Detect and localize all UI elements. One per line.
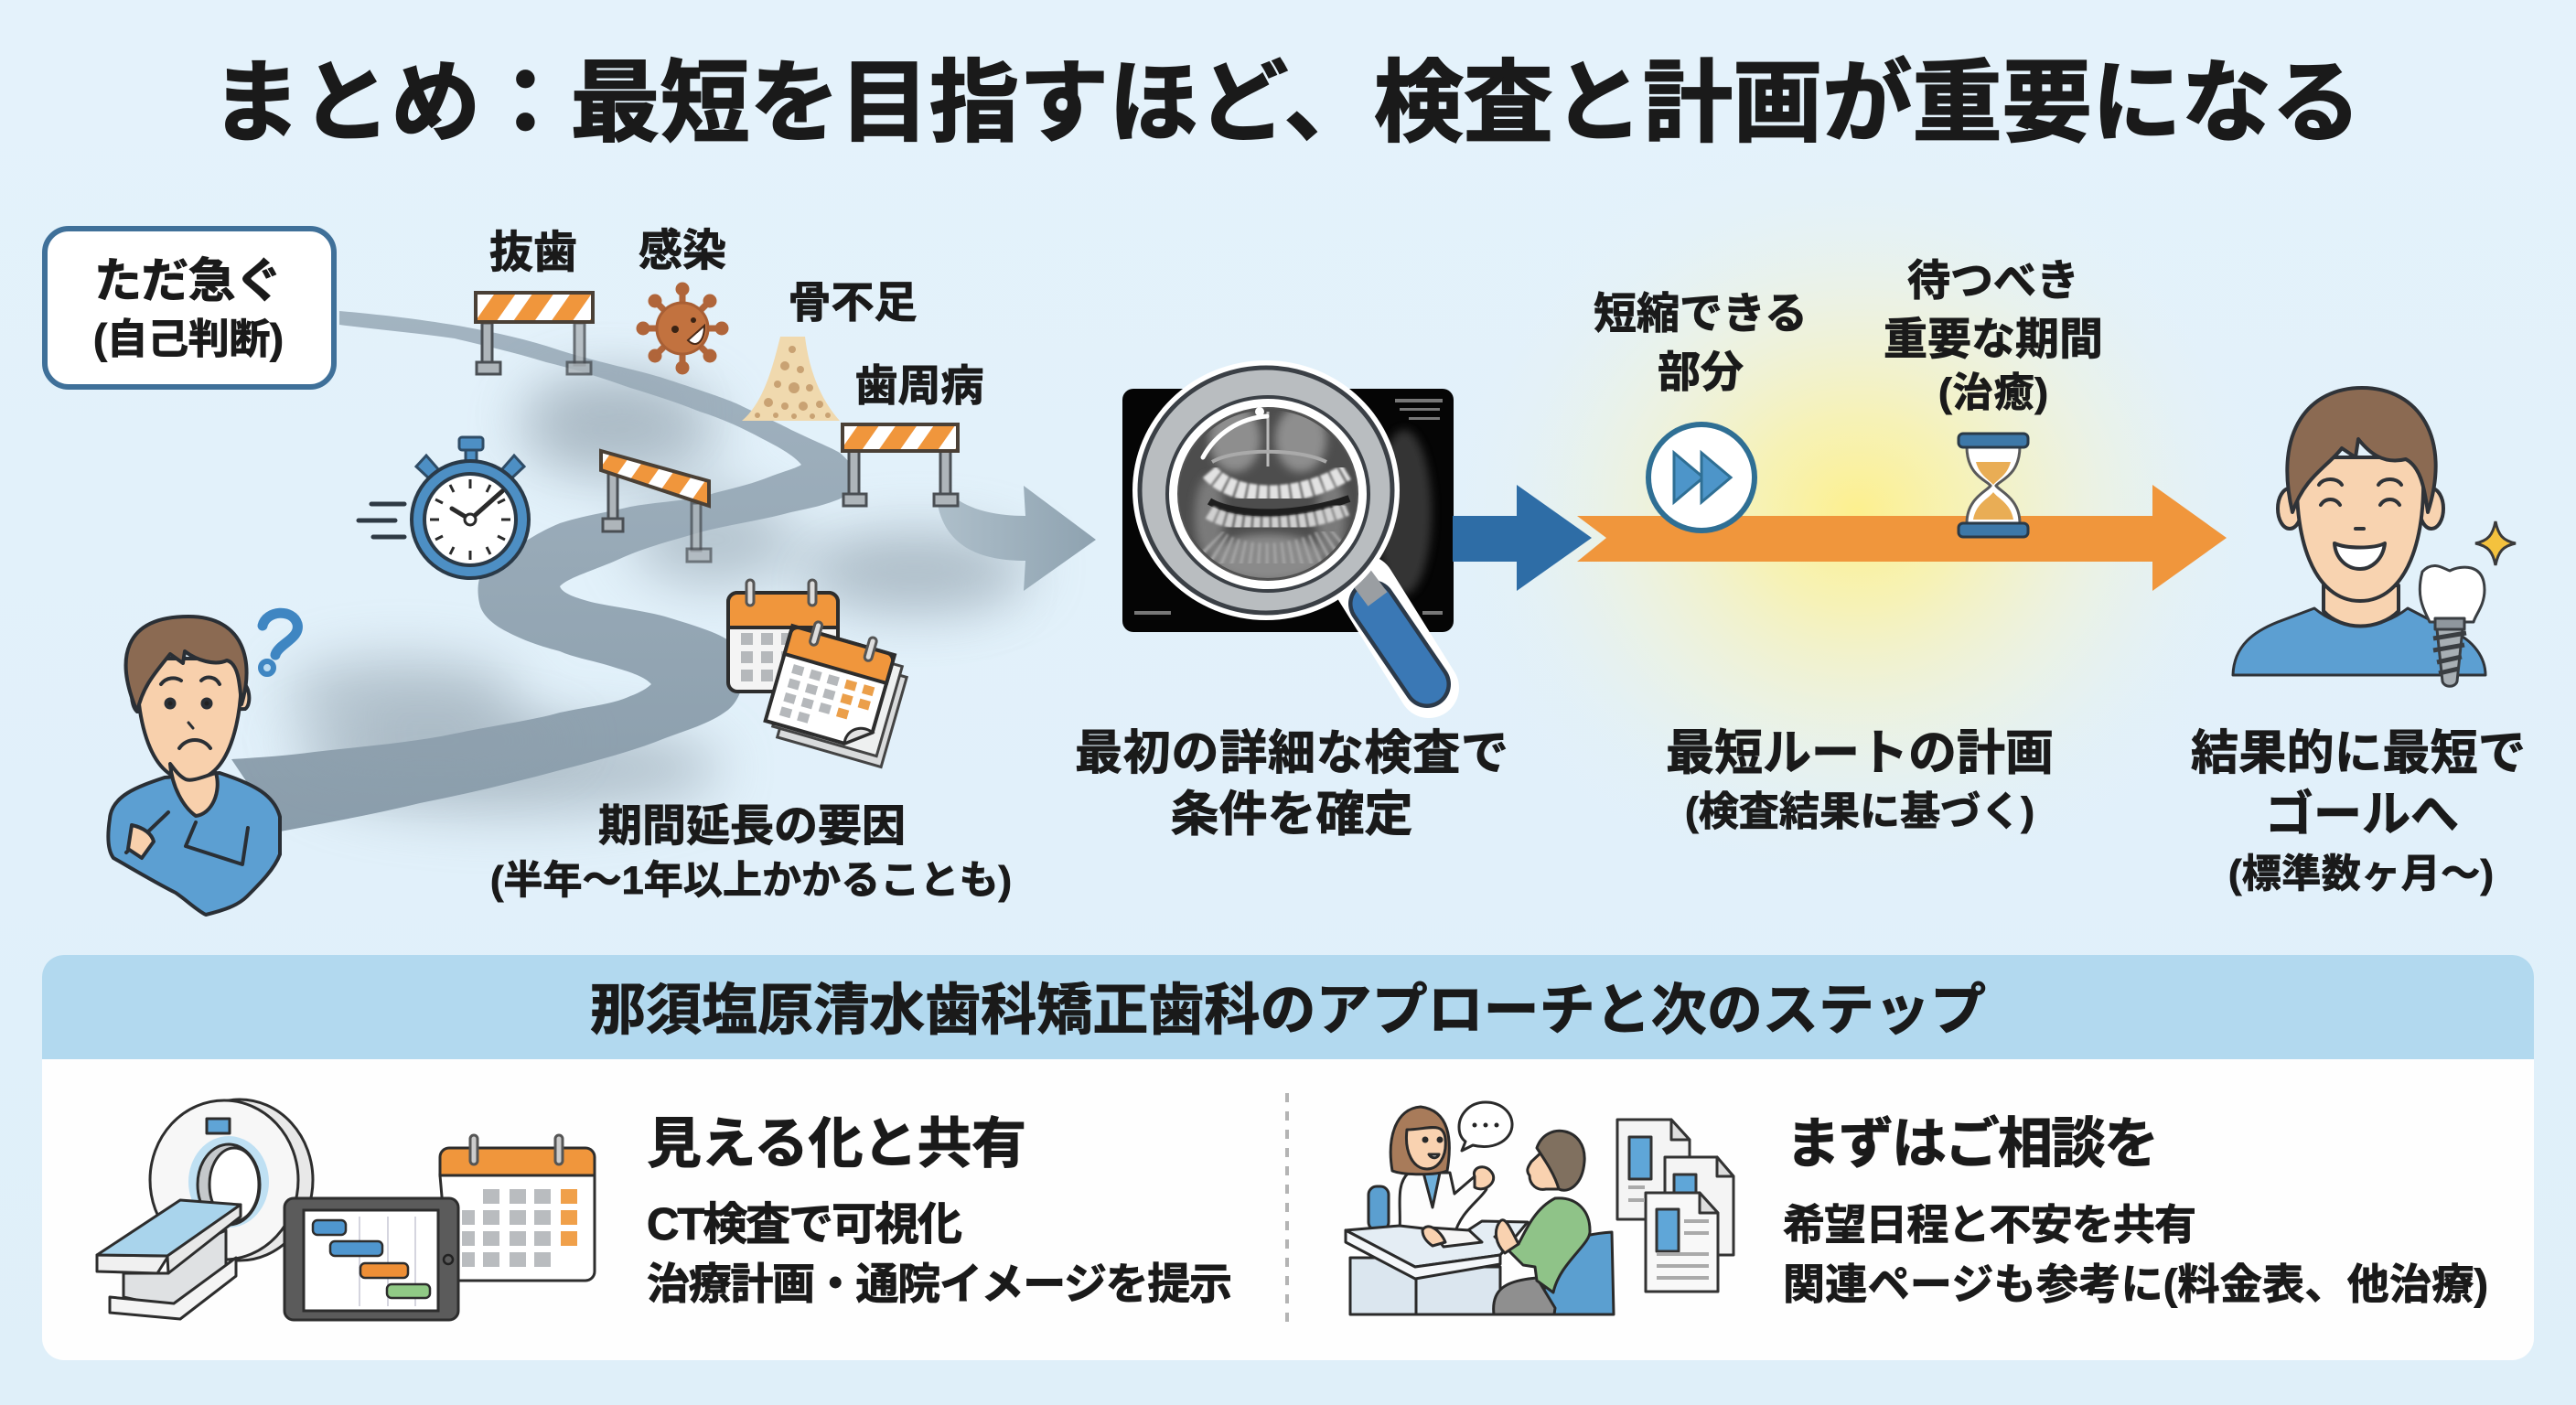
callout: rushing: (自己判断) [93,316,284,362]
label: important waiting period: 重要な期間 [1884,316,2103,364]
text: consult first: 関連ページも参考に(料金表、他治療) [1783,1260,2488,1308]
icon: hourglass [1959,434,2028,537]
icon: calendars [728,580,909,767]
panel: approach and next steps [42,955,2534,1360]
callout: rushing [45,229,334,387]
text: visualization and sharing: CT検査で可視化 [647,1200,962,1249]
icon: stopwatch [359,437,529,578]
label: part that can be shortened: 部分 [1658,348,1744,396]
label: important waiting period: 待つべき [1907,256,2079,305]
label: extraction: 抜歯 [489,229,577,277]
caption: goal: (標準数ヶ月〜) [2228,853,2494,896]
caption: first detailed exam [1075,727,1508,842]
caption: shortest route plan: (検査結果に基づく) [1685,789,2034,834]
caption: goal: ゴールへ [2265,788,2459,842]
text: visualization and sharing [647,1113,1232,1308]
panel heading: 那須塩原清水歯科矯正歯科のアプローチと次のステップ [590,979,1986,1041]
question mark dot [261,661,274,674]
label: part that can be shortened: 短縮できる [1594,289,1808,338]
caption: causes of delay [490,802,1012,903]
caption: first detailed exam: 最初の詳細な検査で [1075,727,1508,780]
icon: smiling man with implant [2233,388,2485,675]
icon: implant [2420,565,2485,686]
icon: x-ray and magnifier [1122,360,1454,688]
grey curved arrow [938,486,1096,591]
icon: sparkle [2475,521,2516,565]
icon: consultation scene [1346,1102,1614,1314]
caption: goal: 結果的に最短で [2191,727,2526,780]
text: consult first [1783,1113,2488,1308]
label: important waiting period [1884,256,2103,415]
orange arrow [1577,485,2227,591]
text: consult first: 希望日程と不安を共有 [1783,1201,2196,1249]
caption: causes of delay: (半年〜1年以上かかることも) [490,859,1012,903]
label: periodontal disease: 歯周病 [854,361,984,410]
callout: rushing: ただ急ぐ [94,255,283,308]
yellow glow behind route [1427,128,2287,896]
text: visualization and sharing: 見える化と共有 [647,1113,1026,1174]
caption: goal [2191,727,2526,896]
barrier 3 tilted [601,451,711,562]
text: consult first: まずはご相談を [1786,1113,2159,1174]
icon: documents [1617,1120,1733,1292]
label: important waiting period: (治癒) [1938,370,2048,415]
icon: virus [639,285,725,371]
icon: question mark [263,613,297,655]
label: infection: 感染 [639,227,726,275]
caption: shortest route plan [1666,726,2054,834]
caption: shortest route plan: 最短ルートの計画 [1666,726,2054,780]
label: bone shortage: 骨不足 [789,278,917,327]
icon: fast-forward [1648,424,1755,531]
icon: calendar [440,1135,595,1281]
barrier 1 [476,293,593,374]
blue arrow [1453,485,1592,591]
icon: worried man [108,617,280,915]
label: part that can be shortened [1594,289,1808,396]
barrier 2 [843,424,958,506]
icon: CT scanner [97,1099,313,1319]
caption: first detailed exam: 条件を確定 [1171,788,1412,842]
caption: causes of delay: 期間延長の要因 [598,802,906,851]
title: まとめ：最短を目指すほど、検査と計画が重要になる [211,52,2361,153]
text: visualization and sharing: 治療計画・通院イメージを提示 [647,1260,1232,1308]
icon: bone [742,337,840,421]
winding road with fog [231,311,1034,831]
icon: tablet with gantt chart [284,1198,458,1320]
